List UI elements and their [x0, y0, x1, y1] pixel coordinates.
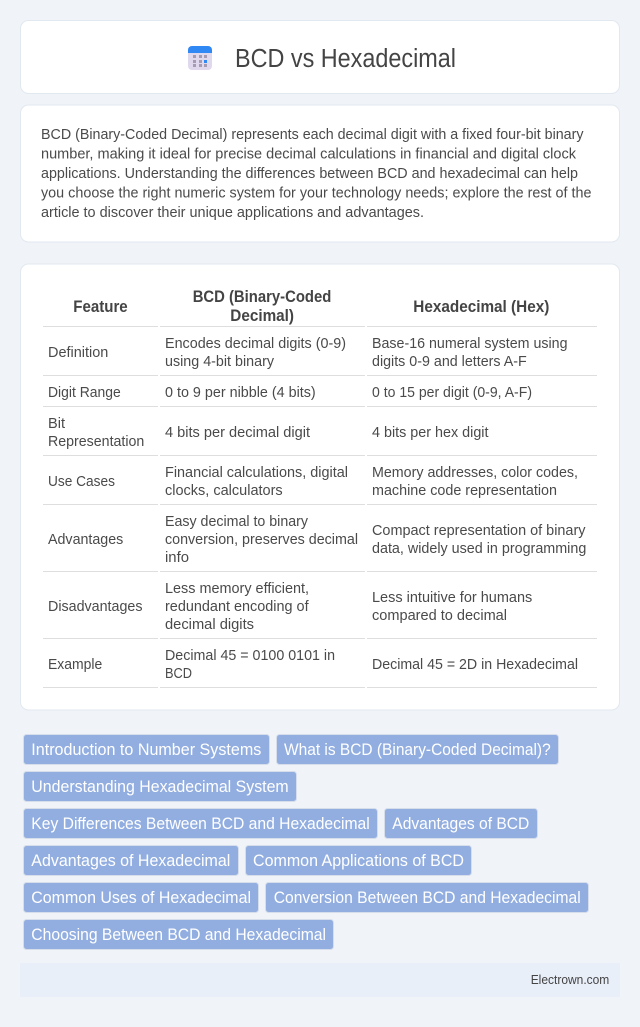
table row: disadvantages: Less intuitive for humans — [372, 589, 532, 606]
tag: advantages of BCD — [384, 808, 538, 838]
table row: bit representation: Bit — [48, 415, 66, 432]
table row: disadvantages: redundant encoding of — [165, 598, 309, 615]
table row: bit representation: 4 bits per hex digit — [372, 424, 489, 441]
tag: conversion between BCD and hexadecimal — [266, 882, 588, 912]
table header row: BCD (Binary-Coded — [193, 287, 331, 306]
tag: what is BCD — [276, 734, 558, 764]
table header row — [73, 287, 549, 325]
text block: introduction paragraph: applications. Understanding the differences between BCD and hexadecimal can help — [41, 165, 578, 182]
table header row: Feature — [73, 297, 128, 316]
table row: definition: digits 0-9 and letters A-F — [372, 353, 527, 370]
tag: understanding hexadecimal system — [24, 772, 296, 802]
table row: use cases: clocks, calculators — [165, 482, 283, 499]
table row: use cases: machine code representation — [372, 482, 557, 499]
table row: example: Decimal 45 = 2D in Hexadecimal — [372, 656, 578, 673]
table row: bit representation: Representation — [48, 433, 144, 450]
topic tags — [24, 734, 588, 950]
tag: understanding hexadecimal system: Understanding Hexadecimal System — [31, 777, 289, 796]
table row: advantages: Easy decimal to binary — [165, 513, 308, 530]
table row: bit representation: 4 bits per decimal digit — [165, 424, 311, 441]
table row: disadvantages: compared to decimal — [372, 607, 507, 624]
table row: advantages — [48, 513, 586, 566]
text block: introduction paragraph: BCD (Binary-Coded Decimal) represents each decimal digit with a fixed four-bit binary — [41, 126, 584, 143]
table row: use cases: Financial calculations, digital — [165, 464, 348, 481]
footer credit: Electrown.com — [531, 972, 609, 987]
panel: header — [20, 20, 620, 94]
tag: advantages of hexadecimal — [24, 846, 238, 876]
table header row: Decimal) — [230, 306, 294, 325]
tag: key differences: Key Differences Between BCD and Hexadecimal — [31, 814, 370, 833]
table row: disadvantages: Disadvantages — [48, 598, 142, 615]
table row: advantages: info — [165, 549, 189, 566]
text block: introduction paragraph — [41, 126, 592, 221]
footer — [20, 963, 620, 997]
table row: advantages: Advantages — [48, 531, 123, 548]
table row: use cases: Memory addresses, color codes, — [372, 464, 578, 481]
table row: digit range: 0 to 15 per digit (0-9, A-F) — [372, 384, 532, 401]
table row: use cases — [48, 464, 578, 499]
tag: key differences — [24, 808, 378, 838]
table row: example: Decimal 45 = 0100 0101 in — [165, 647, 335, 664]
table row: advantages: conversion, preserves decimal — [165, 531, 358, 548]
panel: comparison table — [20, 264, 620, 710]
text block: introduction paragraph: you choose the right numeric system for your technology needs; explore the rest of the — [41, 185, 592, 202]
tag: conversion between BCD and hexadecimal: Conversion Between BCD and Hexadecimal — [274, 888, 581, 907]
table row: definition: Definition — [48, 344, 108, 361]
tag: advantages of BCD: Advantages of BCD — [392, 814, 529, 833]
table row: advantages: data, widely used in programming — [372, 540, 586, 557]
table row: example: BCD — [165, 665, 192, 682]
table row: use cases: Use Cases — [48, 473, 115, 490]
table row: digit range: 0 to 9 per nibble (4 bits) — [165, 384, 316, 401]
table row: definition: using 4-bit binary — [165, 353, 274, 370]
table header row: Hexadecimal (Hex) — [413, 297, 549, 316]
table row: disadvantages: decimal digits — [165, 616, 254, 633]
table row: example: Example — [48, 656, 102, 673]
text block: introduction paragraph: article to discover their unique applications and advantages. — [41, 204, 424, 221]
table row: definition: Base-16 numeral system using — [372, 335, 568, 352]
table row: digit range: Digit Range — [48, 384, 121, 401]
table row: disadvantages: Less memory efficient, — [165, 580, 309, 597]
icon: calculator — [188, 46, 212, 70]
tag: what is BCD: What is BCD (Binary-Coded Decimal)? — [284, 740, 551, 759]
tag: choosing between BCD and hexadecimal — [24, 920, 334, 950]
tag: advantages of hexadecimal: Advantages of Hexadecimal — [31, 851, 230, 870]
table row: example — [48, 647, 578, 682]
tag: common applications of BCD — [246, 846, 472, 876]
table row: advantages: Compact representation of binary — [372, 522, 586, 539]
tag: introduction to number systems: Introduction to Number Systems — [31, 740, 261, 759]
text block: introduction paragraph: number, making it ideal for precise decimal calculations in financial and digital clock — [41, 145, 576, 162]
title: BCD vs Hexadecimal — [235, 45, 456, 73]
tag: common uses of hexadecimal — [24, 882, 258, 912]
tag: introduction to number systems — [24, 734, 270, 764]
table row: definition: Encodes decimal digits (0-9) — [165, 335, 346, 352]
table row: digit range — [48, 384, 532, 401]
table row: disadvantages — [48, 580, 532, 633]
tag: choosing between BCD and hexadecimal: Choosing Between BCD and Hexadecimal — [31, 925, 326, 944]
tag: common applications of BCD: Common Applications of BCD — [253, 851, 464, 870]
table row: bit representation — [48, 415, 489, 450]
panel: introduction — [20, 105, 620, 242]
tag: common uses of hexadecimal: Common Uses of Hexadecimal — [31, 888, 251, 907]
table row: definition — [48, 335, 568, 370]
